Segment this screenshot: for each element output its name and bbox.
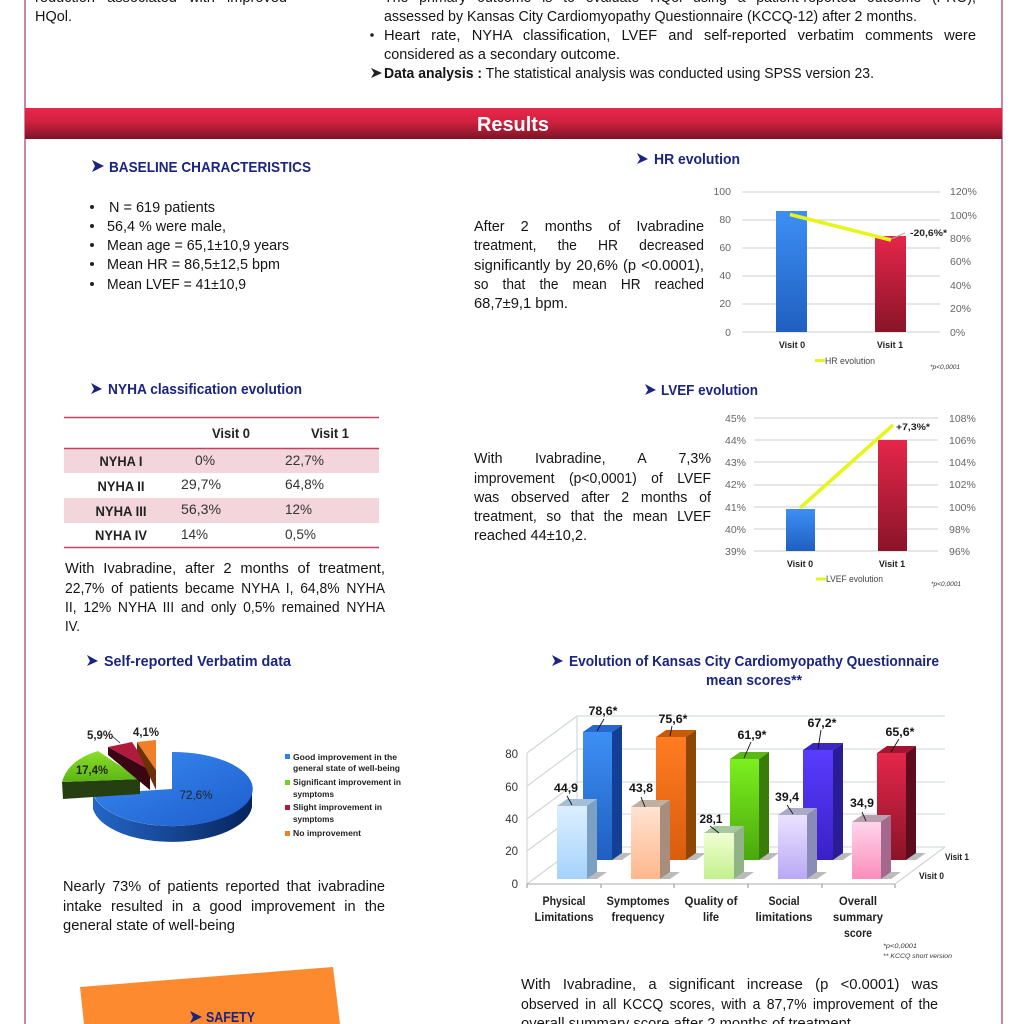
table: NYHA visits: 64,8% — [285, 476, 324, 492]
category labels: Physical — [542, 896, 586, 908]
text block: LVEF finding: treatment, so that the mean LVEF — [474, 509, 711, 525]
chart: 3D pie — [62, 727, 253, 842]
category labels: Social — [768, 896, 800, 908]
list: baseline values: N = 619 patients — [109, 200, 215, 216]
chart: 3D pie: 72,6% — [180, 790, 212, 802]
table: NYHA visits: Visit 1 — [311, 426, 349, 441]
table: NYHA visits — [64, 418, 379, 548]
table: NYHA visits: 22,7% — [285, 452, 324, 468]
text block: verbatim finding: intake resulted in a good improvement in the — [63, 899, 385, 915]
text block: NYHA finding — [65, 561, 385, 635]
chart: LVEF bars and line: 43% — [725, 457, 746, 469]
text block: HR finding: After 2 months of Ivabradine — [474, 219, 704, 235]
chart: HR bars and line: 120% — [950, 186, 977, 198]
category labels: limitations — [756, 912, 812, 924]
category labels: life — [703, 912, 719, 924]
heading: self-reported verbatim data: Self-reported Verbatim data — [104, 653, 292, 670]
panel: HR evolution — [474, 151, 977, 371]
chart: HR bars and line: 0% — [950, 327, 965, 339]
chart: HR bars and line: 20 — [719, 298, 731, 310]
value labels: 61,9* — [738, 728, 767, 742]
category labels — [534, 896, 884, 940]
text block: NYHA finding: IV. — [65, 619, 80, 635]
chart: HR bars and line: 40 — [719, 270, 731, 282]
heading: baseline characteristics: BASELINE CHARACTERISTICS — [109, 159, 311, 176]
chart: 3D KCCQ bars: 60 — [505, 782, 518, 794]
legend: pie categories: No improvement — [293, 828, 361, 838]
table: NYHA visits: 0% — [195, 452, 215, 468]
chart: 3D pie: 17,4% — [76, 765, 108, 777]
text block: methods end — [370, 0, 976, 82]
chart: 3D KCCQ bars: Visit 0 — [919, 871, 944, 881]
panel: KCCQ scores — [505, 653, 969, 1024]
chart: 3D KCCQ bars: ** KCCQ short version — [883, 953, 952, 960]
text block: verbatim finding: general state of well-being — [63, 918, 235, 934]
chart: LVEF bars and line: Visit 0 — [787, 559, 813, 569]
text block: methods end: Heart rate, NYHA classification, LVEF and self-reported verbatim comments were — [384, 28, 976, 44]
series: Visit 1 bars — [583, 725, 926, 860]
value labels: 43,8 — [629, 781, 653, 795]
chart: HR bars and line — [713, 186, 977, 371]
text block: methods end: considered as a secondary outcome. — [384, 47, 620, 63]
heading: KCCQ evolution: mean scores** — [706, 672, 802, 689]
chart: LVEF bars and line: 42% — [725, 479, 746, 491]
text block: HR finding — [474, 219, 704, 312]
chart: 3D KCCQ bars: *p<0,0001 — [883, 943, 917, 950]
chart: 3D KCCQ bars — [505, 704, 969, 960]
chart: 3D pie: 5,9% — [87, 730, 113, 742]
chart: LVEF bars and line: 98% — [949, 524, 970, 536]
text block: HR finding: significantly by 20,6% (p <0.0001), — [474, 258, 704, 274]
chart: LVEF bars and line: 40% — [725, 524, 746, 536]
chart: HR bars and line: 20% — [950, 303, 971, 315]
chart: HR bars and line: 100% — [950, 210, 977, 222]
heading: LVEF evolution: LVEF evolution — [661, 382, 758, 399]
panel: baseline characteristics — [90, 159, 311, 293]
chart: LVEF bars and line: *p<0,0001 — [931, 581, 961, 588]
text block: verbatim finding — [63, 879, 385, 934]
value labels: 78,6* — [588, 704, 618, 718]
text block: objective end — [35, 0, 287, 25]
chart: 3D KCCQ bars: 0 — [512, 879, 518, 891]
category labels: frequency — [612, 912, 665, 924]
chart: LVEF bars and line: Visit 1 — [879, 559, 905, 569]
value labels: 65,6* — [886, 725, 915, 739]
section banner: Results: Results — [477, 113, 549, 136]
chart: HR bars and line: 80 — [719, 214, 731, 226]
chart: LVEF bars and line: 106% — [949, 435, 976, 447]
chart: LVEF bars and line: 45% — [725, 413, 746, 425]
legend: pie categories: Slight improvement in — [293, 802, 382, 812]
legend: pie categories — [285, 752, 401, 838]
text block: LVEF finding — [473, 451, 712, 544]
category labels: Symptomes — [606, 896, 670, 908]
text block: methods end: Data analysis : The statistical analysis was conducted using SPSS version 23. — [384, 66, 874, 82]
legend: pie categories: Good improvement in the — [293, 752, 397, 762]
legend: pie categories: Significant improvement in — [293, 777, 401, 787]
value labels: 75,6* — [658, 712, 688, 726]
value labels: 39,4 — [775, 790, 799, 804]
text block: LVEF finding: was observed after 2 months of — [473, 490, 712, 506]
heading: KCCQ evolution: Evolution of Kansas City Cardiomyopathy Questionnaire — [569, 653, 939, 670]
table: NYHA visits: Visit 0 — [212, 426, 250, 441]
text block: NYHA finding: 22,7% of patients became NYHA I, 64,8% NYHA — [65, 581, 385, 597]
text block: verbatim finding: Nearly 73% of patients reported that ivabradine — [63, 879, 385, 895]
chart: HR bars and line: -20,6%* — [910, 228, 948, 238]
text block: HR finding: so that the mean HR reached — [474, 277, 704, 293]
value labels: 67,2* — [808, 716, 837, 730]
heading: safety — [190, 1009, 255, 1024]
heading: NYHA classification evolution: NYHA classification evolution — [108, 381, 302, 398]
value labels — [554, 704, 915, 833]
value labels: 28,1 — [700, 812, 723, 826]
chart: HR bars and line: 60% — [950, 256, 971, 268]
text block: LVEF finding: improvement (p<0,0001) of LVEF — [474, 471, 711, 487]
heading: KCCQ evolution — [552, 653, 939, 689]
series: Visit 0 bars — [557, 799, 901, 879]
table: NYHA visits: NYHA II — [98, 479, 144, 494]
chart: HR bars and line: 60 — [719, 242, 731, 254]
text block: HR finding: treatment, the HR decreased — [474, 238, 704, 254]
chart: 3D KCCQ bars: Visit 1 — [945, 852, 969, 862]
chart: HR bars and line: 0 — [725, 327, 731, 339]
value labels: 44,9 — [554, 781, 578, 795]
list: baseline values: 56,4 % were male, — [107, 219, 226, 235]
text block: NYHA finding: With Ivabradine, after 2 months of treatment, — [65, 561, 385, 577]
list: baseline values: Mean age = 65,1±10,9 years — [107, 238, 289, 254]
panel: LVEF evolution — [473, 382, 976, 588]
list: baseline values — [90, 200, 289, 293]
table: NYHA visits: NYHA IV — [95, 528, 147, 543]
panel: safety callout — [80, 967, 340, 1024]
chart: LVEF bars and line: 100% — [949, 502, 976, 514]
table: NYHA visits: NYHA III — [96, 504, 146, 519]
text block: KCCQ finding — [521, 977, 938, 1024]
table: NYHA visits: NYHA I — [100, 454, 142, 469]
table: NYHA visits: 29,7% — [181, 476, 221, 492]
chart: 3D pie: 4,1% — [133, 727, 159, 739]
chart: LVEF bars and line: 96% — [949, 546, 970, 558]
text block: objective end: HQol. — [35, 9, 72, 25]
value labels: 34,9 — [850, 796, 874, 810]
category labels: score — [844, 928, 872, 940]
text block: LVEF finding: reached 44±10,2. — [474, 528, 587, 544]
legend: pie categories: general state of well-being — [293, 763, 400, 773]
table: NYHA visits: 14% — [181, 526, 208, 542]
chart: 3D KCCQ bars: 20 — [505, 846, 518, 858]
chart: LVEF bars and line: 108% — [949, 413, 976, 425]
chart: LVEF bars and line: LVEF evolution — [826, 574, 883, 584]
chart: 3D KCCQ bars: 40 — [505, 814, 518, 826]
legend: pie categories: symptoms — [293, 789, 334, 799]
section banner: Results — [25, 108, 1002, 139]
heading: HR evolution: HR evolution — [654, 151, 740, 168]
chart: HR bars and line: Visit 0 — [779, 340, 805, 350]
text block: KCCQ finding: With Ivabradine, a significant increase (p <0.0001) was — [521, 977, 938, 993]
table: NYHA visits: 12% — [285, 501, 312, 517]
text block: LVEF finding: With Ivabradine, A 7,3% — [474, 451, 711, 467]
category labels: Overall — [839, 896, 877, 908]
chart: HR bars and line: 100 — [713, 186, 731, 198]
chart: HR bars and line: 80% — [950, 233, 971, 245]
chart: HR bars and line: HR evolution — [825, 356, 875, 366]
table: NYHA visits: 0,5% — [285, 526, 316, 542]
chart: LVEF bars and line: 41% — [725, 502, 746, 514]
chart: HR bars and line: 40% — [950, 280, 971, 292]
panel: self-reported verbatim — [62, 653, 401, 934]
text block: KCCQ finding: observed in all KCCQ scores, with a 87,7% improvement of the — [521, 997, 938, 1013]
list: baseline values: Mean HR = 86,5±12,5 bpm — [107, 257, 280, 273]
category labels: summary — [833, 912, 884, 924]
legend: pie categories: symptoms — [293, 814, 334, 824]
text block: HR finding: 68,7±9,1 bpm. — [474, 296, 568, 312]
chart: LVEF bars and line: 39% — [725, 546, 746, 558]
panel: NYHA classification — [64, 381, 385, 635]
category labels: Quality of — [684, 896, 738, 908]
chart: HR bars and line: Visit 1 — [877, 340, 903, 350]
chart: LVEF bars and line: 102% — [949, 479, 976, 491]
chart: HR bars and line: *p<0,0001 — [930, 364, 960, 371]
category labels: Limitations — [534, 912, 594, 924]
text block: methods end: assessed by Kansas City Cardiomyopathy Questionnaire (KCCQ-12) after 2 months. — [384, 9, 917, 25]
chart: LVEF bars and line: 44% — [725, 435, 746, 447]
table: NYHA visits: 56,3% — [181, 501, 221, 517]
chart: LVEF bars and line: +7,3%* — [896, 422, 931, 432]
chart: 3D KCCQ bars: 80 — [505, 749, 518, 761]
chart: LVEF bars and line: 104% — [949, 457, 976, 469]
chart: LVEF bars and line — [725, 413, 976, 588]
text block: NYHA finding: II, 12% NYHA III and only 0,5% remained NYHA — [65, 600, 385, 616]
list: baseline values: Mean LVEF = 41±10,9 — [107, 277, 246, 293]
